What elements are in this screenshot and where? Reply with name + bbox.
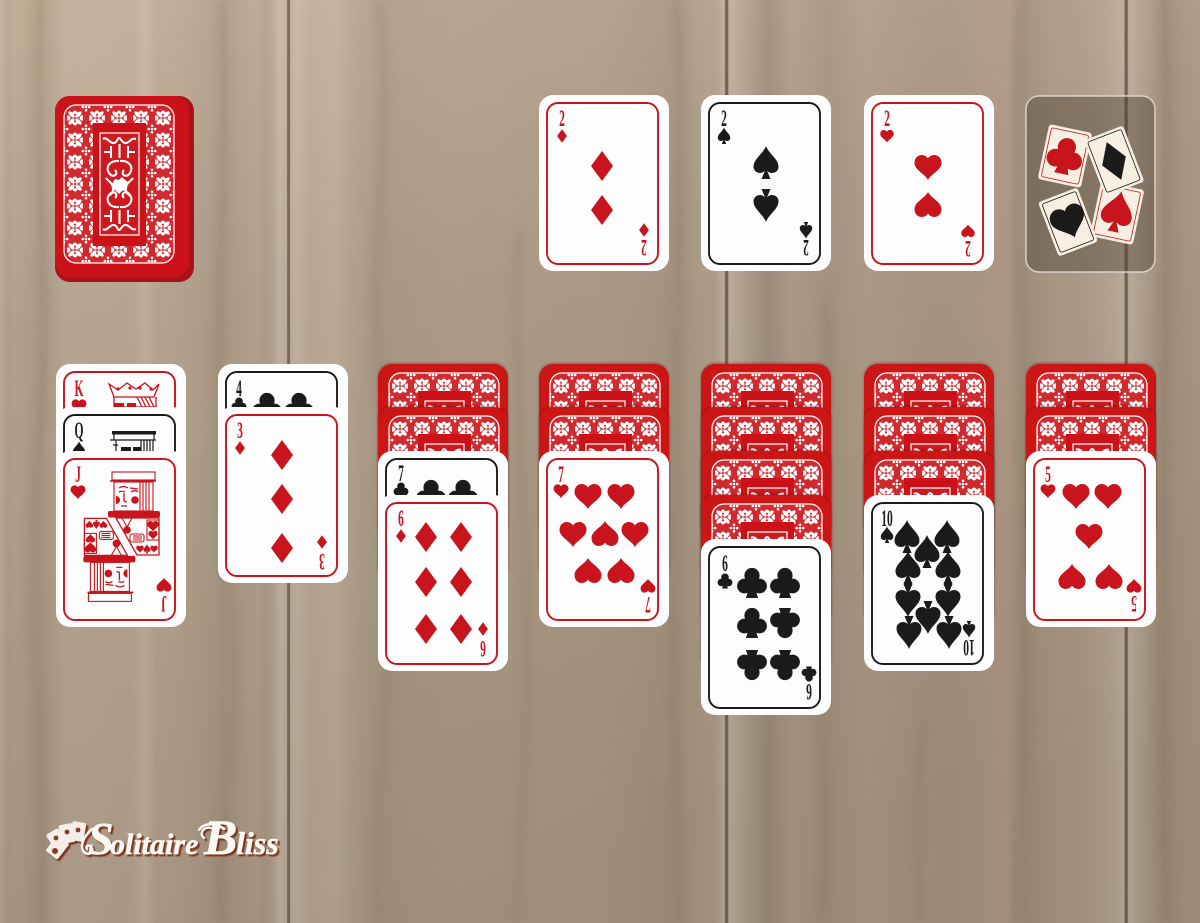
face-down cards [539, 364, 669, 583]
card: queen of spades: Q [75, 418, 83, 443]
foundation: 2 of diamonds: 2 [641, 235, 647, 260]
card: 6 of clubs [701, 539, 831, 715]
card: 5 of hearts [1026, 451, 1156, 627]
card: 5 of hearts: 5 [1045, 462, 1051, 487]
card: king of hearts [56, 364, 186, 540]
tableau column 3 [378, 364, 508, 671]
card: 5 of hearts: 5 [1131, 591, 1137, 616]
face-down cards [378, 364, 508, 583]
card: 7 of hearts: 7 [645, 592, 651, 617]
card: 10 of spades: 10 [963, 635, 975, 660]
card: 4 of clubs [218, 364, 348, 540]
card: 6 of clubs: 6 [722, 551, 728, 576]
logo: Solitaire Bliss [45, 809, 279, 865]
foundation: 2 of diamonds [539, 95, 669, 271]
card: jack of hearts [56, 451, 186, 627]
foundation: 2 of hearts: 2 [884, 106, 890, 131]
logo swirls [82, 824, 224, 854]
foundation: 2 of spades: 2 [721, 106, 727, 131]
mini card: black diamond [1084, 125, 1144, 197]
foundation: 2 of hearts [864, 95, 994, 271]
stock pile [55, 96, 194, 282]
card: 10 of spades [864, 495, 994, 671]
logo wordmark: liss [236, 825, 279, 861]
logo wordmark: S [88, 813, 114, 864]
face-down cards [1026, 364, 1156, 583]
card: 7 of hearts: 7 [558, 462, 564, 487]
card: 4 of clubs: 4 [236, 376, 242, 401]
card: 7 of hearts [539, 451, 669, 627]
card: 7 of clubs: 7 [398, 461, 404, 486]
card: king of hearts: K [75, 376, 83, 401]
face-down cards [864, 364, 994, 627]
card: 6 of diamonds: 6 [480, 636, 486, 661]
logo wordmark: B [203, 809, 237, 865]
card: jack of hearts: J [161, 591, 167, 616]
card: 3 of diamonds: 3 [319, 549, 325, 574]
tableau column 6 [864, 364, 994, 671]
stock pile card back art [64, 105, 174, 263]
tableau column 1: K, Q, J [56, 364, 186, 627]
face-down cards [701, 364, 831, 671]
card: 6 of diamonds [378, 495, 508, 671]
tableau column 2: 4, 3 [218, 364, 348, 583]
mini card: red club [1038, 124, 1092, 188]
logo icon: fan of cards [45, 821, 86, 860]
tableau column 5 [701, 364, 831, 715]
card: 3 of diamonds [218, 407, 348, 583]
card: 6 of diamonds: 6 [398, 506, 404, 531]
tableau column 7 [1026, 364, 1156, 627]
card: jack of hearts: J [75, 462, 81, 487]
mini card: black heart [1038, 187, 1098, 257]
tableau column 4 [539, 364, 669, 627]
card: 7 of clubs [378, 451, 508, 627]
card: 6 of clubs: 6 [806, 679, 812, 704]
card: 3 of diamonds: 3 [237, 418, 243, 443]
card: queen of spades [56, 407, 186, 583]
foundation: 2 of spades: 2 [803, 235, 809, 260]
mini card: red spade [1090, 181, 1144, 245]
empty foundation slot with four mini cards [1026, 96, 1155, 272]
logo wordmark: olitaire [110, 828, 198, 861]
foundation: 2 of spades [701, 95, 831, 271]
foundation: 2 of hearts: 2 [965, 236, 971, 261]
card: 10 of spades: 10 [881, 506, 893, 531]
foundation: 2 of diamonds: 2 [559, 106, 565, 131]
